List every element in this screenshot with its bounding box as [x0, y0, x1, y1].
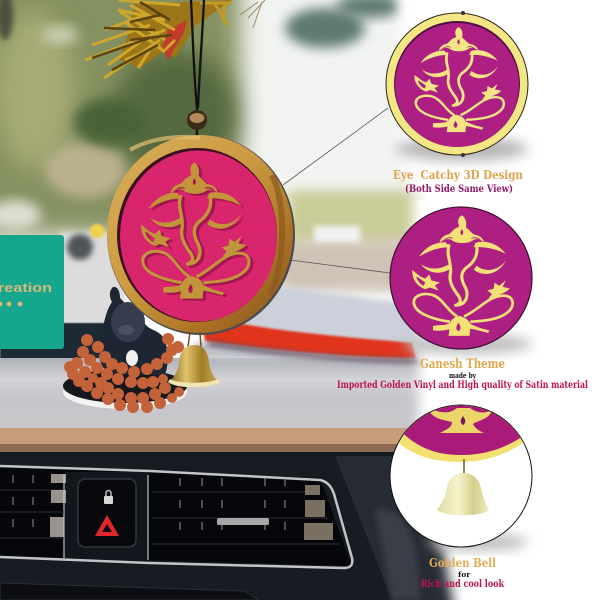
caption: Ganesh theme: made by	[449, 371, 476, 380]
white fade overlay	[398, 0, 600, 600]
caption: eye catchy design: (Both Side Same View)	[405, 184, 513, 195]
caption: eye catchy design	[393, 167, 523, 195]
detail circle: 3D design	[386, 11, 528, 161]
tinsel garland	[85, 0, 265, 78]
car console	[0, 452, 470, 600]
brass bell	[168, 332, 220, 387]
hanging cord and bead	[187, 0, 207, 143]
caption: Ganesh theme	[337, 357, 588, 391]
caption: golden bell: Rich and cool look	[421, 579, 505, 590]
connector lines	[283, 108, 390, 273]
detail circle: golden bell	[385, 400, 537, 551]
dark dash edge	[0, 323, 112, 360]
caption: golden bell	[421, 556, 505, 590]
caption: eye catchy design: Eye Catchy 3D Design	[393, 167, 523, 182]
dashboard tan strip	[0, 428, 450, 448]
lower console line	[0, 583, 258, 600]
photo background: blurred trees	[0, 0, 404, 235]
Shiva statue with rudraksha beads	[63, 287, 187, 413]
Ganesh motif gold	[141, 162, 249, 299]
right console panel	[335, 456, 470, 600]
teal box	[0, 235, 64, 349]
air vents	[0, 466, 352, 568]
photo background: distant road and greenery	[60, 190, 420, 350]
caption: golden bell: for	[458, 570, 471, 579]
detail circle: Ganesh theme	[390, 207, 532, 354]
dashboard top	[0, 358, 450, 430]
hazard button	[78, 479, 136, 547]
red cloth streak	[203, 324, 416, 358]
Ganesh motif shadow	[144, 164, 252, 301]
main pendant	[107, 135, 295, 335]
caption: Ganesh theme: Ganesh Theme	[420, 357, 505, 372]
caption: golden bell: Golden Bell	[429, 556, 496, 570]
